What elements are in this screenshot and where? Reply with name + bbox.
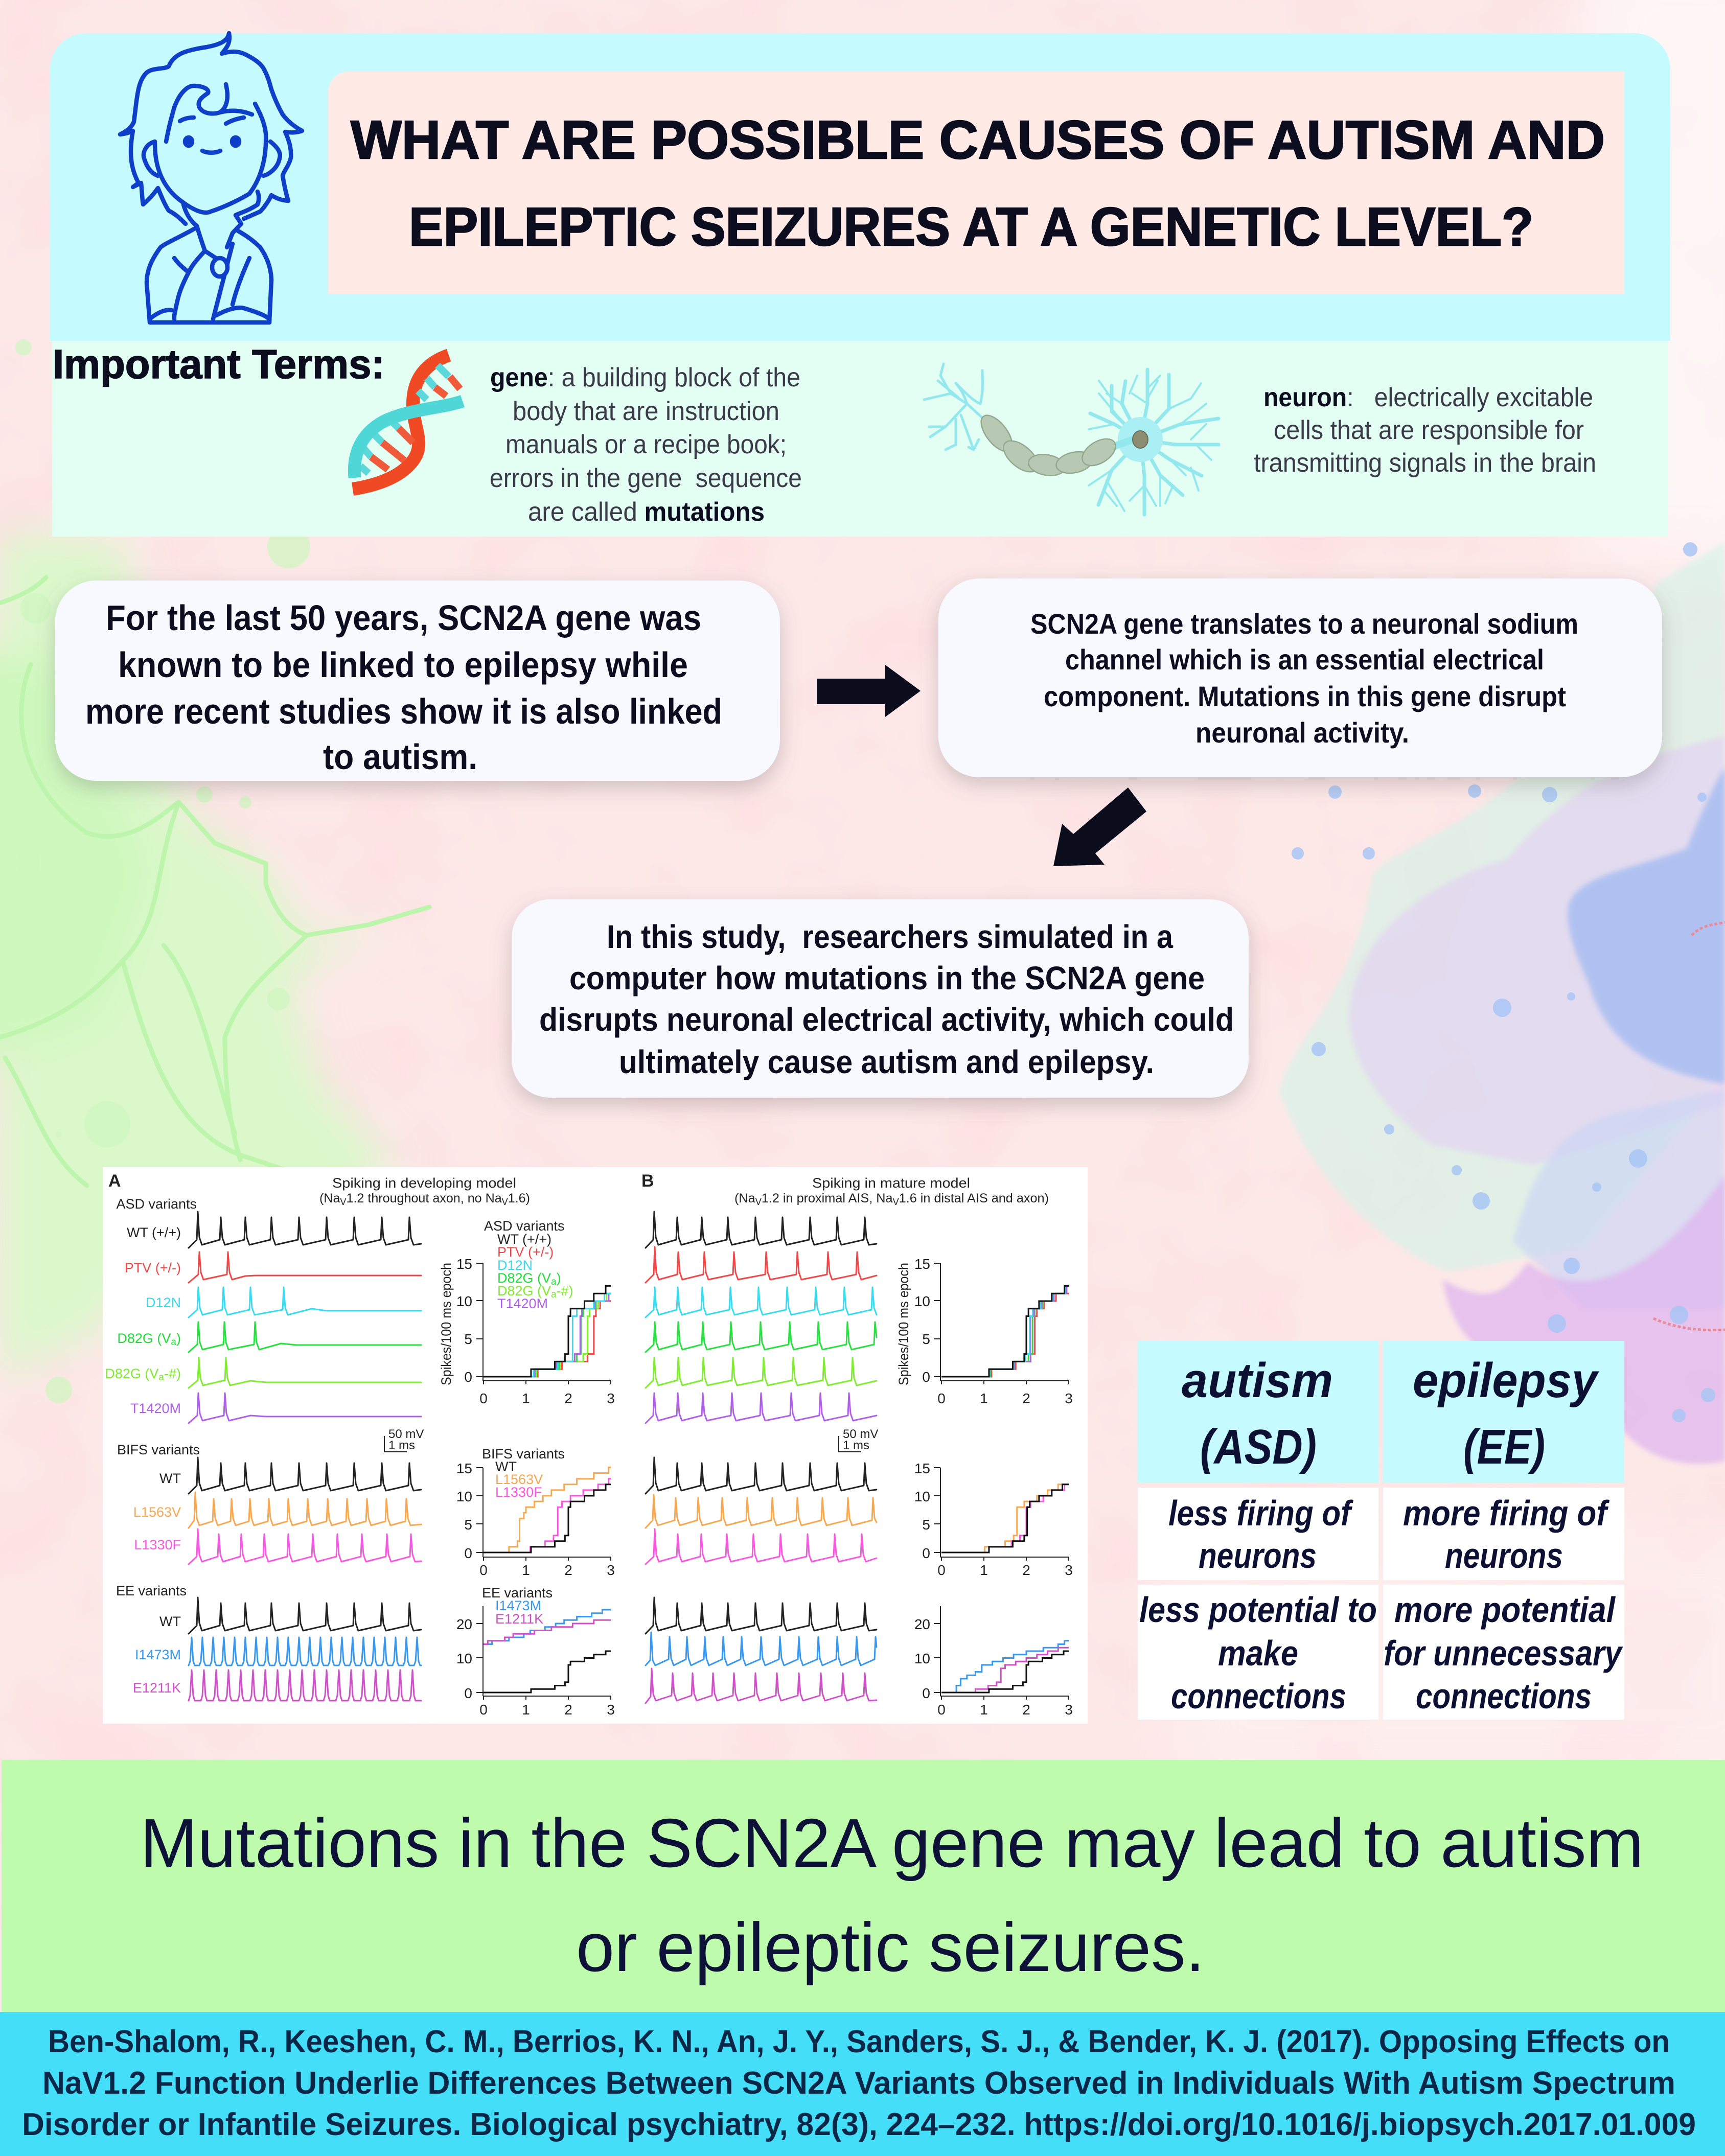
callout: sodium channel: SCN2A gene translates to a neuronal sodium: [1030, 608, 1578, 640]
row: firing autism: neurons: [1199, 1536, 1317, 1575]
callout: sodium channel: neuronal activity.: [1195, 716, 1409, 749]
callout: SCN2A history: [55, 581, 780, 781]
column head: epilepsy: epilepsy: [1413, 1353, 1599, 1408]
scale bar B: 50 mV: [843, 1427, 878, 1441]
chart: A ASD variants: Spikes/100 ms epoch: [439, 1263, 454, 1385]
callout: study description: [512, 899, 1249, 1098]
chart: B EE variants: 1: [980, 1702, 988, 1718]
chart: A ASD variants: ASD variants: [484, 1218, 565, 1234]
scale bar B: [839, 1427, 878, 1452]
panel B heading: B: [641, 1171, 654, 1191]
chart: A BIFS variants: WT: [495, 1459, 517, 1474]
neuron definition: cells that are responsible for: [1274, 415, 1584, 445]
figure: spiking simulations: [103, 1167, 1088, 1724]
variant labels: D82G (V: [105, 1366, 158, 1381]
chart: A EE variants: [456, 1585, 615, 1718]
callout: study description: ultimately cause autism and epilepsy.: [619, 1044, 1154, 1080]
row: firing autism: less firing of: [1168, 1493, 1354, 1533]
callout: sodium channel: [938, 578, 1662, 777]
chart: A EE variants: 3: [607, 1702, 615, 1718]
panel B heading: V: [755, 1197, 762, 1207]
row: connections autism: make: [1218, 1633, 1298, 1673]
chart: A BIFS variants: 3: [607, 1562, 615, 1578]
variant labels: EE variants: [116, 1583, 187, 1598]
chart: B ASD variants: Spikes/100 ms epoch: [896, 1263, 911, 1385]
panel A heading: 1.6): [508, 1191, 530, 1205]
callout: SCN2A history: known to be linked to epilepsy while: [118, 645, 688, 685]
chart: B ASD variants: 2: [1022, 1390, 1030, 1406]
column head: autism: autism: [1182, 1353, 1333, 1408]
chart: A BIFS variants: L1563V: [495, 1472, 543, 1487]
chart: A EE variants: EE variants: [482, 1585, 553, 1601]
chart: A EE variants: 10: [456, 1651, 472, 1666]
callout: study description: disrupts neuronal electrical activity, which could: [539, 1001, 1234, 1038]
chart: A BIFS variants: 10: [456, 1489, 472, 1504]
icon: doctor character: [120, 33, 302, 322]
chart: B EE variants: 0: [922, 1685, 930, 1701]
panel B heading: [641, 1171, 1049, 1207]
callout: sodium channel: channel which is an essential electrical: [1065, 643, 1544, 676]
chart: B ASD variants: 0: [937, 1390, 946, 1406]
row: firing epilepsy: more firing of: [1403, 1493, 1610, 1533]
row: connections epilepsy: connections: [1416, 1676, 1592, 1716]
variant labels: WT: [159, 1614, 181, 1629]
chart: A ASD variants: ): [557, 1270, 561, 1286]
chart: A ASD variants: 15: [456, 1256, 472, 1272]
chart: A ASD variants: 0: [464, 1369, 472, 1385]
heading: important terms: Important Terms:: [53, 341, 385, 387]
callout: SCN2A history: For the last 50 years, SCN2A gene was: [106, 598, 701, 638]
table: autism vs epilepsy: [1138, 1341, 1624, 1720]
chart: A BIFS variants: 1: [522, 1562, 530, 1578]
chart: B ASD variants: [896, 1256, 1073, 1406]
chart: B BIFS variants: 5: [922, 1517, 930, 1533]
panel A heading: (Na: [319, 1191, 340, 1205]
chart: B BIFS variants: [914, 1460, 1073, 1578]
gene definition: are called mutations: [528, 497, 771, 527]
variant labels: T1420M: [130, 1401, 181, 1416]
variant labels: WT (+/+): [127, 1225, 181, 1240]
variant labels: BIFS variants: [117, 1442, 200, 1457]
variant labels: D82G (V: [117, 1331, 171, 1346]
row: connections autism: connections: [1171, 1676, 1346, 1716]
chart: A ASD variants: 0: [479, 1390, 488, 1406]
panel A heading: Spiking in developing model: [332, 1175, 516, 1191]
chart: A ASD variants: D82G (V: [497, 1270, 551, 1286]
citation band: NaV1.2 Function Underlie Differences Between SCN2A Variants Observed in Individuals With Autism Spectrum: [42, 2066, 1675, 2101]
chart: A ASD variants: 3: [607, 1390, 615, 1406]
panel B heading: 1.2 in proximal AIS, Na: [762, 1191, 893, 1205]
panel B heading: V: [893, 1197, 899, 1207]
title: EPILEPTIC SEIZURES AT A GENETIC LEVEL?: [409, 197, 1533, 257]
row: connections epilepsy: for unnecessary: [1384, 1633, 1623, 1673]
panel A heading: A: [108, 1171, 121, 1191]
callout: study description: computer how mutations in the SCN2A gene: [569, 960, 1205, 996]
variant labels: ASD variants: [116, 1196, 197, 1212]
chart: A BIFS variants: 2: [564, 1562, 572, 1578]
scale bar B: 1 ms: [843, 1439, 869, 1452]
variant labels: E1211K: [133, 1680, 181, 1696]
chart: B ASD variants: 1: [980, 1390, 988, 1406]
chart: A ASD variants: -#): [557, 1283, 573, 1299]
row: firing epilepsy: neurons: [1445, 1536, 1563, 1575]
chart: A BIFS variants: [456, 1446, 615, 1578]
chart: A EE variants: E1211K: [495, 1611, 543, 1627]
chart: A BIFS variants: 5: [464, 1517, 472, 1533]
chart: B BIFS variants: 3: [1065, 1562, 1073, 1578]
chart: A ASD variants: a: [551, 1277, 557, 1287]
chart: B BIFS variants: 0: [922, 1545, 930, 1561]
chart: B EE variants: 3: [1065, 1702, 1073, 1718]
panel B heading: Spiking in mature model: [812, 1175, 970, 1191]
chart: A BIFS variants: BIFS variants: [482, 1446, 565, 1462]
row: connections epilepsy: more potential: [1394, 1590, 1616, 1630]
chart: B EE variants: 10: [914, 1651, 930, 1666]
chart: A ASD variants: WT (+/+): [497, 1232, 551, 1247]
title box: [328, 72, 1624, 294]
chart: A ASD variants: T1420M: [497, 1296, 548, 1311]
chart: A ASD variants: PTV (+/-): [497, 1244, 554, 1260]
gene definition: manuals or a recipe book;: [505, 430, 787, 459]
panel B heading: (Na: [734, 1191, 755, 1205]
callout: sodium channel: component. Mutations in this gene disrupt: [1044, 680, 1566, 712]
panel: header: [50, 33, 1670, 341]
arrow: right: [817, 665, 921, 717]
chart: B BIFS variants: 0: [937, 1562, 946, 1578]
callout: SCN2A history: to autism.: [323, 737, 477, 777]
variant labels: L1563V: [133, 1504, 181, 1520]
chart: B EE variants: 2: [1022, 1702, 1030, 1718]
chart: B BIFS variants: 1: [980, 1562, 988, 1578]
chart: A BIFS variants: 0: [479, 1562, 488, 1578]
scale bar A: 50 mV: [388, 1427, 424, 1441]
panel A heading: V: [340, 1197, 347, 1207]
chart: A ASD variants: 5: [464, 1331, 472, 1347]
variant labels: I1473M: [135, 1647, 181, 1662]
traces: panel B: [646, 1212, 877, 1703]
chart: A EE variants: I1473M: [495, 1598, 541, 1613]
chart: B BIFS variants: 2: [1022, 1562, 1030, 1578]
conclusion band: or epileptic seizures.: [576, 1909, 1205, 1986]
gene definition: body that are instruction: [513, 397, 779, 426]
variant labels: a: [158, 1372, 164, 1383]
variant labels: L1330F: [134, 1537, 181, 1552]
neuron definition: neuron: electrically excitable: [1263, 383, 1613, 412]
chart: B ASD variants: 3: [1065, 1390, 1073, 1406]
chart: B BIFS variants: 15: [914, 1460, 930, 1476]
chart: A ASD variants: 1: [522, 1390, 530, 1406]
chart: B EE variants: [914, 1606, 1073, 1718]
panel: important terms: [52, 341, 1668, 537]
chart: A ASD variants: 10: [456, 1293, 472, 1309]
variant labels: [105, 1196, 200, 1696]
chart: B EE variants: 20: [914, 1616, 930, 1632]
conclusion band: Mutations in the SCN2A gene may lead to autism: [140, 1804, 1644, 1882]
panel A heading: V: [502, 1197, 508, 1207]
variant labels: PTV (+/-): [125, 1260, 181, 1276]
variant labels: D12N: [146, 1295, 181, 1310]
column head: autism: (ASD): [1200, 1420, 1317, 1474]
scale bar A: 1 ms: [388, 1439, 415, 1452]
chart: B ASD variants: 15: [914, 1256, 930, 1272]
chart: B ASD variants: 0: [922, 1369, 930, 1385]
panel A heading: 1.2 throughout axon, no Na: [347, 1191, 502, 1205]
variant labels: WT: [159, 1471, 181, 1486]
callout: study description: In this study, researchers simulated in a: [607, 918, 1173, 955]
chart: A EE variants: 2: [564, 1702, 572, 1718]
chart: B ASD variants: 10: [914, 1293, 930, 1309]
arrow: down-left: [1053, 787, 1146, 866]
chart: A EE variants: 1: [522, 1702, 530, 1718]
column head: epilepsy: (EE): [1463, 1420, 1545, 1474]
row: connections autism: less potential to: [1139, 1590, 1377, 1630]
chart: A ASD variants: 2: [564, 1390, 572, 1406]
chart: A BIFS variants: 0: [464, 1545, 472, 1561]
gene definition: errors in the gene sequence: [490, 463, 802, 493]
chart: B EE variants: 0: [937, 1702, 946, 1718]
citation band: [0, 2012, 1725, 2156]
chart: A EE variants: 20: [456, 1616, 472, 1632]
variant labels: ): [176, 1331, 181, 1346]
traces: panel A: [189, 1212, 421, 1701]
icon: neuron: [924, 364, 1218, 515]
neuron definition: transmitting signals in the brain: [1254, 448, 1596, 478]
icon: DNA helix: [353, 355, 463, 489]
callout: SCN2A history: more recent studies show it is also linked: [85, 691, 722, 731]
scale bar A: [384, 1427, 424, 1452]
citation band: Disorder or Infantile Seizures. Biological psychiatry, 82(3), 224–232. https://doi.org/10.1016/j.biopsych.2017.01.009: [22, 2107, 1696, 2142]
title: WHAT ARE POSSIBLE CAUSES OF AUTISM AND: [351, 110, 1605, 170]
chart: A EE variants: 0: [479, 1702, 488, 1718]
variant labels: a: [171, 1337, 176, 1348]
chart: A BIFS variants: 15: [456, 1460, 472, 1476]
chart: B BIFS variants: 10: [914, 1489, 930, 1504]
citation band: Ben-Shalom, R., Keeshen, C. M., Berrios, K. N., An, J. Y., Sanders, S. J., & Bender, K. J. (2017). Opposing Effects on: [48, 2024, 1670, 2059]
chart: A BIFS variants: L1330F: [495, 1485, 542, 1500]
panel A heading: [108, 1171, 530, 1207]
chart: A ASD variants: [439, 1218, 615, 1406]
chart: B ASD variants: 5: [922, 1331, 930, 1347]
chart: A EE variants: 0: [464, 1685, 472, 1701]
gene definition: gene: a building block of the: [490, 363, 820, 392]
conclusion band: [2, 1760, 1725, 2012]
variant labels: -#): [164, 1366, 181, 1381]
chart: A ASD variants: D82G (V: [497, 1283, 551, 1299]
chart: A ASD variants: a: [551, 1289, 557, 1300]
panel B heading: 1.6 in distal AIS and axon): [899, 1191, 1049, 1205]
chart: A ASD variants: D12N: [497, 1258, 533, 1273]
